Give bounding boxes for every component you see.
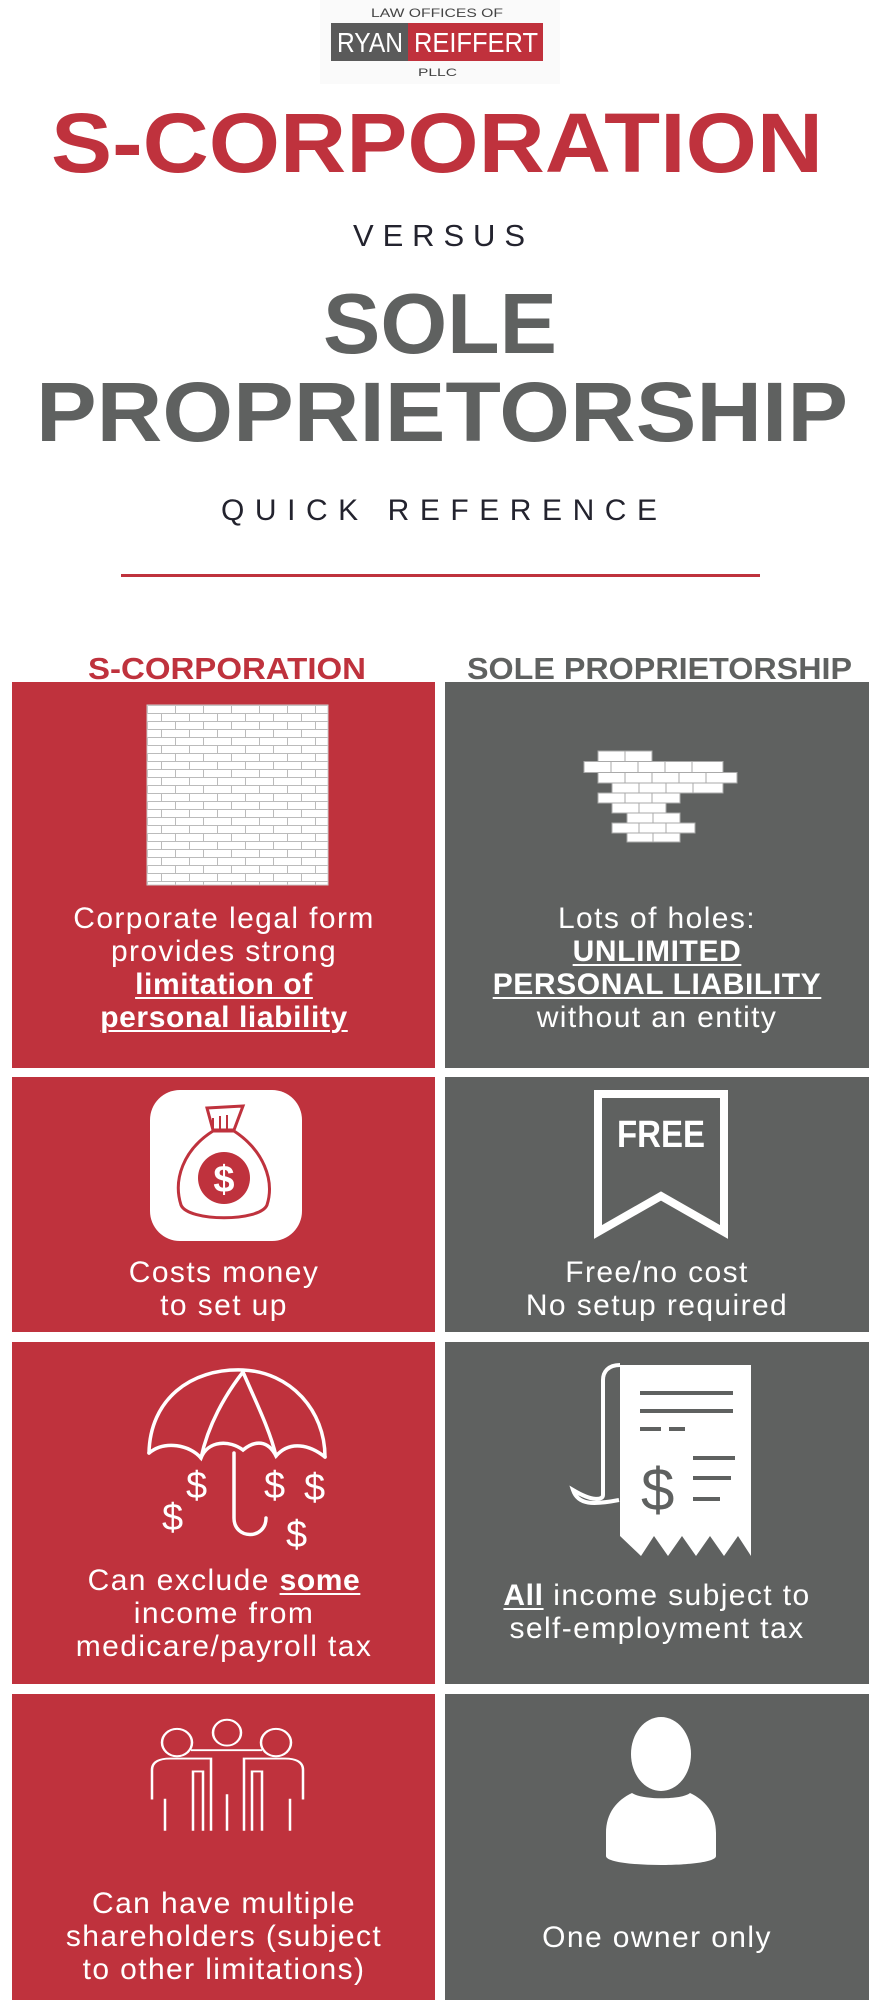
icon: single person — [606, 1717, 716, 1865]
text: s-corp tax: medicare/payroll tax — [76, 1630, 372, 1663]
title: S-Corporation: S-CORPORATION — [51, 96, 823, 190]
logo — [320, 0, 560, 84]
subtitle: quick reference: QUICK REFERENCE — [221, 494, 657, 527]
versus: VERSUS — [353, 218, 525, 253]
text: s-corp cost — [129, 1256, 319, 1322]
text: sole prop tax — [503, 1579, 811, 1645]
text: s-corp liability — [73, 902, 375, 1034]
icon: group of people — [152, 1720, 303, 1831]
column heading: S-Corporation: S-CORPORATION — [88, 651, 366, 686]
icon: solid brick wall — [147, 705, 328, 885]
text: s-corp cost: to set up — [160, 1289, 288, 1322]
text: sole prop owners: One owner only — [542, 1921, 772, 1954]
column heading: Sole Proprietorship: SOLE PROPRIETORSHIP — [467, 651, 852, 686]
text: s-corp liability: provides strong — [111, 935, 337, 968]
text: sole prop liability — [492, 902, 822, 1034]
panel: cost sole prop — [445, 1077, 869, 1332]
icon: umbrella with dollars: $ — [186, 1465, 207, 1507]
icon: umbrella with dollars — [149, 1370, 325, 1556]
text: s-corp liability: personal liability — [100, 1001, 348, 1034]
header titles — [36, 6, 852, 686]
text: sole prop liability: without an entity — [537, 1001, 777, 1034]
panel: cost s-corp — [12, 1077, 435, 1332]
icon: broken brick wall — [584, 751, 737, 842]
text: s-corp owners: to other limitations) — [83, 1953, 365, 1986]
panel: tax sole prop — [445, 1342, 869, 1684]
text: sole prop cost: Free/no cost — [565, 1256, 749, 1289]
text: s-corp owners — [66, 1887, 382, 1986]
logo: RYAN — [337, 27, 403, 58]
text: sole prop liability: Lots of holes: — [558, 902, 756, 935]
text: sole prop tax: All income subject to — [503, 1579, 811, 1612]
text: sole prop cost: No setup required — [526, 1289, 788, 1322]
icon: receipt: $ — [641, 1456, 674, 1523]
icon: receipt — [573, 1365, 751, 1556]
logo: PLLC — [418, 67, 457, 79]
text: sole prop cost — [526, 1256, 788, 1322]
icon: umbrella with dollars: $ — [304, 1467, 325, 1509]
text: s-corp tax: income from — [134, 1597, 314, 1630]
text: sole prop liability: UNLIMITED — [573, 935, 741, 968]
panel: owners sole prop — [445, 1694, 869, 2000]
text: s-corp liability: limitation of — [135, 968, 313, 1001]
panel: tax s-corp — [12, 1342, 435, 1684]
text: s-corp cost: Costs money — [129, 1256, 319, 1289]
icon: free ribbon — [598, 1094, 724, 1232]
text: s-corp owners: shareholders (subject — [66, 1920, 382, 1953]
logo: LAW OFFICES OF — [371, 6, 503, 20]
icon: umbrella with dollars: $ — [264, 1465, 285, 1507]
text: s-corp liability: Corporate legal form — [73, 902, 375, 935]
icon: money bag — [150, 1090, 302, 1241]
text: s-corp tax — [76, 1564, 372, 1663]
title: Sole: SOLE — [323, 277, 557, 372]
icon: umbrella with dollars: $ — [162, 1497, 183, 1539]
icon: money bag: $ — [213, 1159, 235, 1201]
text: sole prop tax: self-employment tax — [509, 1612, 805, 1645]
text: sole prop liability: PERSONAL LIABILITY — [493, 968, 821, 1001]
icon: umbrella with dollars: $ — [286, 1514, 307, 1556]
title: Proprietorship: PROPRIETORSHIP — [36, 365, 848, 459]
text: s-corp owners: Can have multiple — [92, 1887, 356, 1920]
icon: free ribbon: FREE — [617, 1114, 705, 1156]
logo: REIFFERT — [414, 27, 538, 58]
text: s-corp tax: Can exclude some — [88, 1564, 360, 1597]
panel: owners s-corp — [12, 1694, 435, 2000]
panel: liability s-corp — [12, 682, 435, 1068]
panel: liability sole prop — [445, 682, 869, 1068]
